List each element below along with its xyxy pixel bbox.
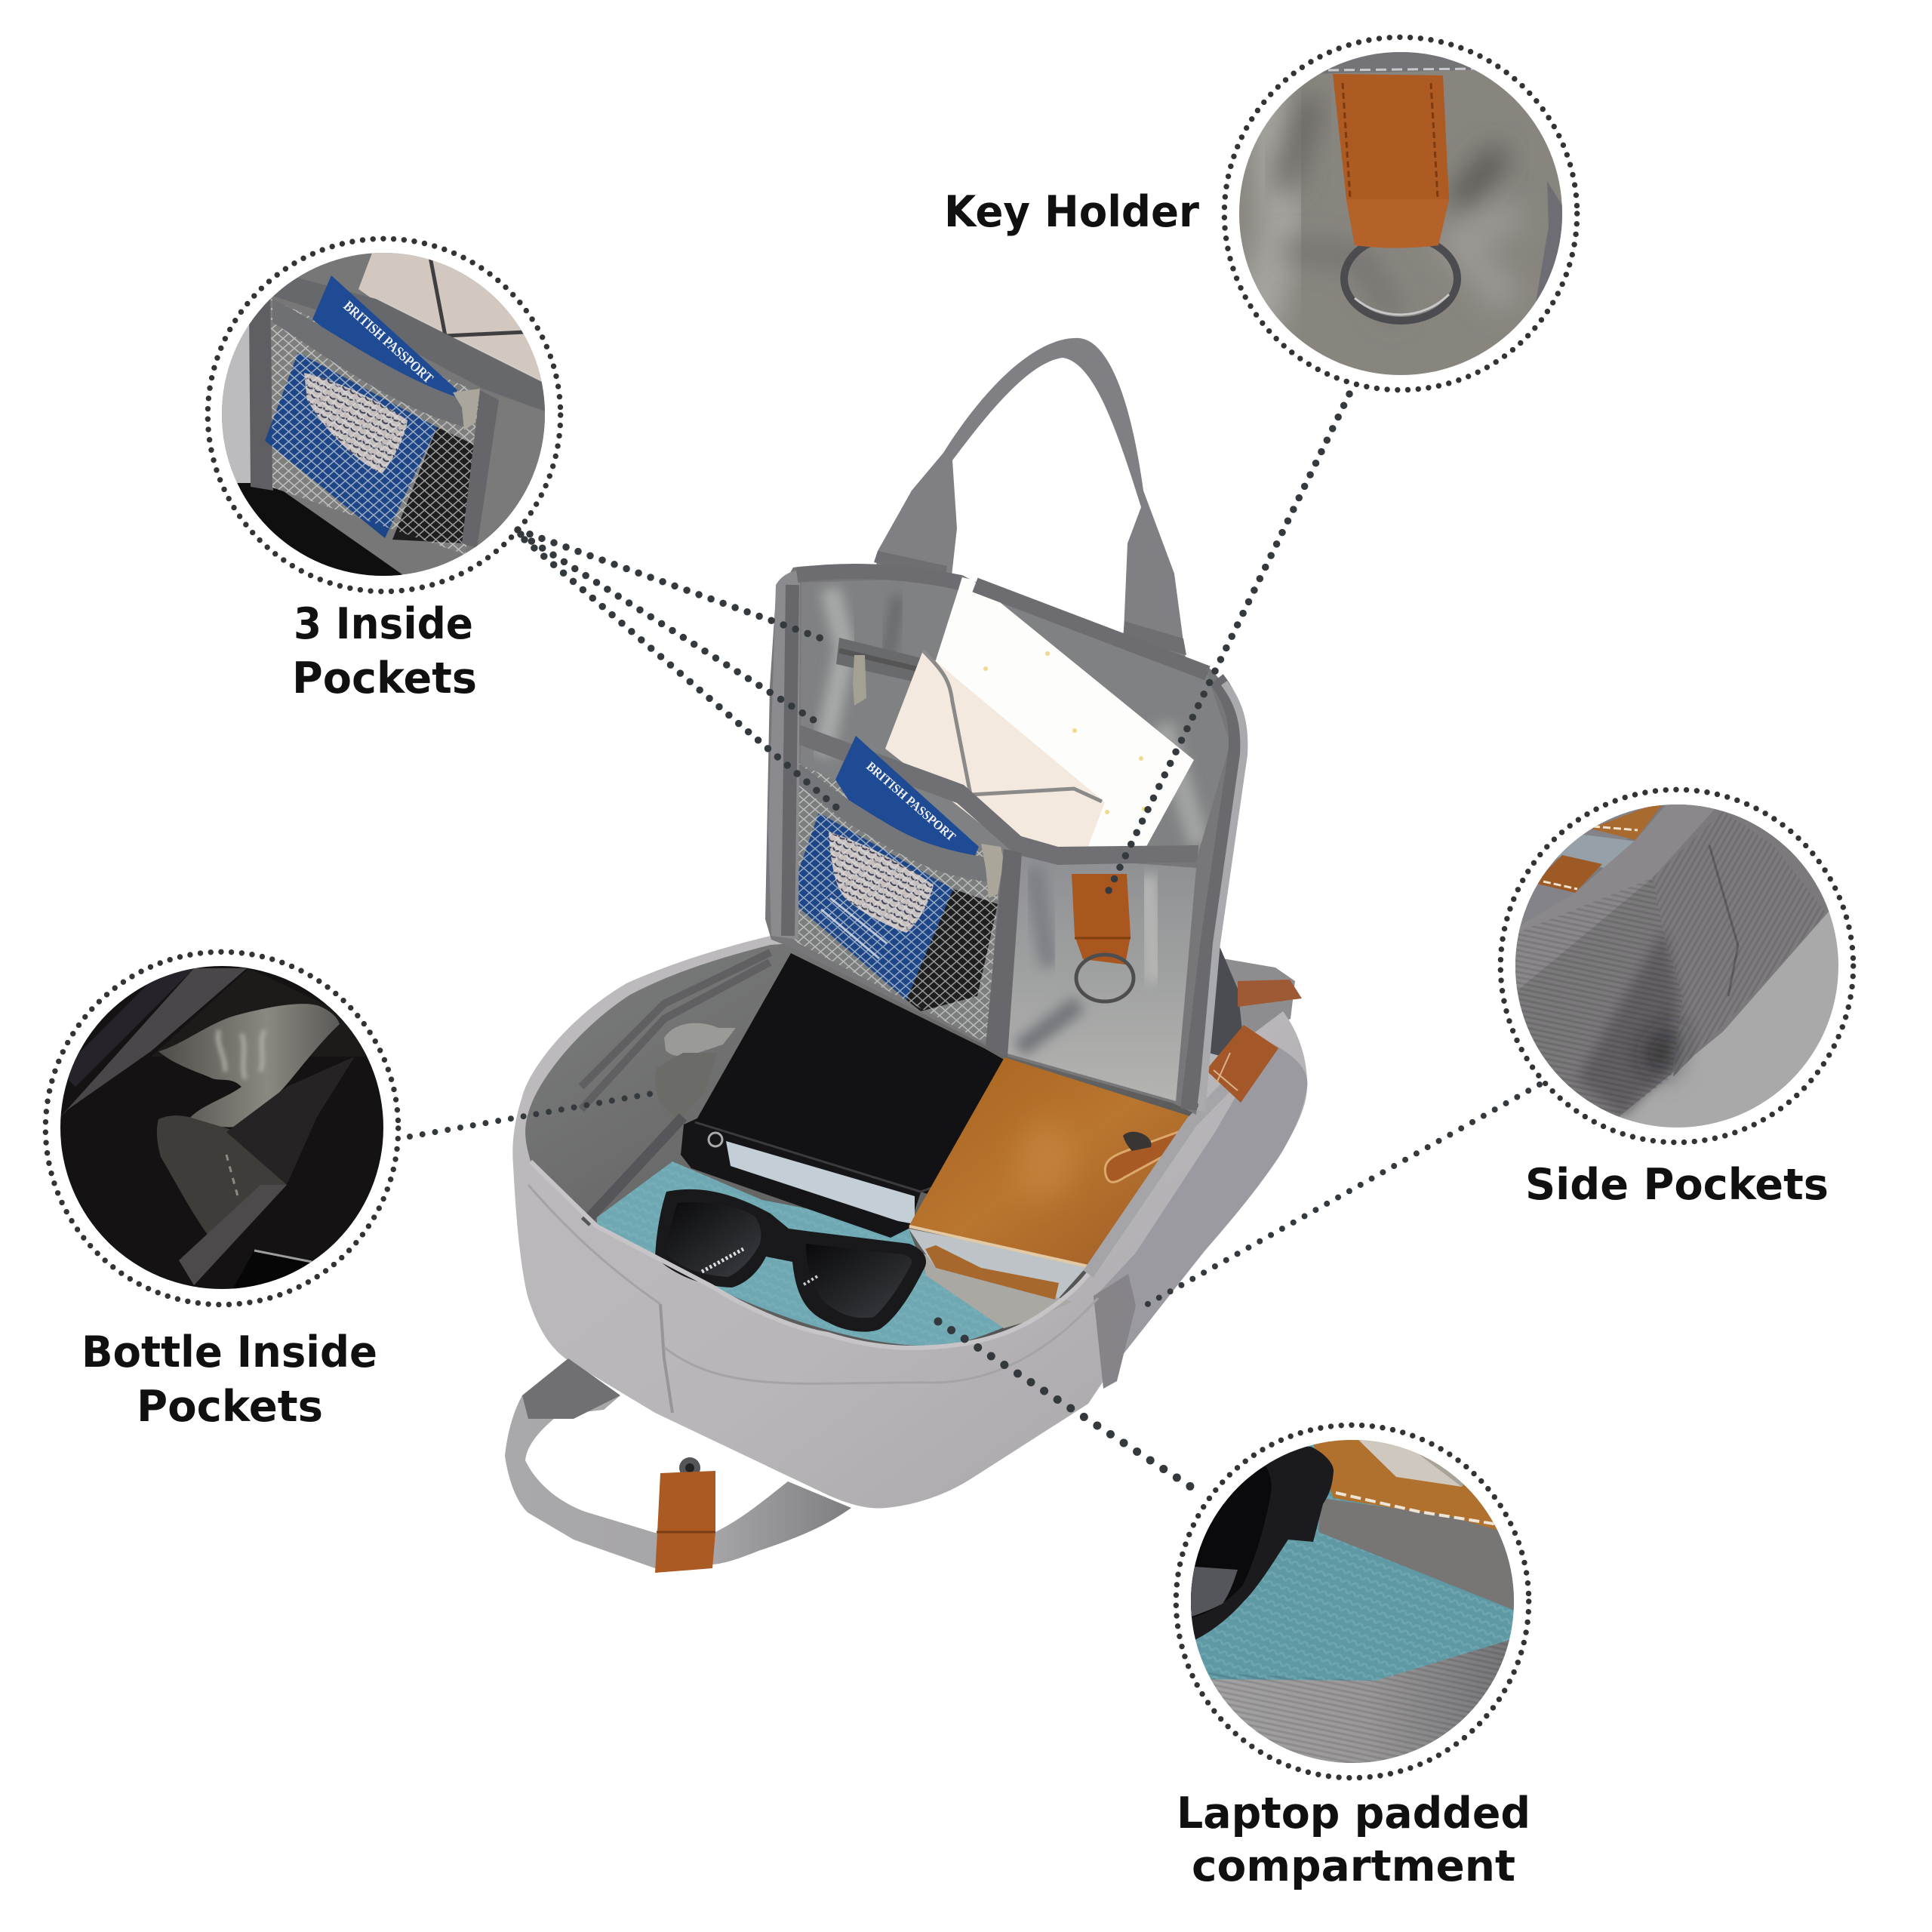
right zipper trim bbox=[1189, 679, 1237, 1109]
label bbox=[292, 599, 477, 703]
strap leather tab with snap bbox=[655, 1457, 715, 1573]
satin highlights bbox=[823, 589, 1200, 845]
front seam bbox=[660, 1304, 672, 1413]
crest engraving bbox=[829, 832, 934, 933]
pocket binding band bbox=[795, 724, 1198, 865]
passport emblem text lines bbox=[821, 898, 887, 958]
leader lines bbox=[410, 394, 1540, 1493]
label: Bottle Inside bbox=[82, 1327, 377, 1377]
soft seam lines bbox=[528, 1185, 1098, 1383]
sunglasses lens bbox=[1185, 1466, 1272, 1617]
opened flap bbox=[765, 565, 1244, 1115]
lower gathers bbox=[157, 1115, 287, 1243]
sunglasses frame bbox=[1185, 1438, 1334, 1641]
brown notebook bbox=[909, 1057, 1195, 1300]
pocket fold bbox=[1673, 1055, 1694, 1077]
side panel shading bbox=[1094, 1041, 1307, 1385]
callout: laptop compartment bbox=[1176, 1425, 1531, 1891]
bottle pocket elastic bbox=[655, 1023, 736, 1121]
zipper pull bbox=[981, 844, 1004, 898]
upper gathers bbox=[158, 1004, 340, 1127]
leader: bottle pocket bbox=[410, 1092, 660, 1137]
dotted ring bbox=[1176, 1425, 1529, 1778]
side tab stitching bbox=[1214, 1053, 1238, 1091]
leather strap bbox=[1333, 74, 1449, 248]
passport upper cover bbox=[835, 736, 979, 859]
dotted ring bbox=[1224, 37, 1577, 390]
key ring bbox=[1076, 955, 1134, 1001]
mesh back bbox=[272, 395, 466, 554]
zipper band bbox=[272, 299, 466, 427]
side pocket seam band bbox=[1094, 1274, 1136, 1389]
label: compartment bbox=[1192, 1841, 1515, 1891]
strap fold bbox=[1346, 199, 1449, 248]
vertical pocket binding bbox=[986, 849, 1022, 1057]
mesh net bbox=[792, 761, 1001, 1044]
backpack photo bbox=[505, 338, 1307, 1573]
label: Pockets bbox=[292, 654, 477, 703]
rim right band bbox=[1088, 1087, 1226, 1274]
passport upper cover: BRITISH PASSPORT bbox=[863, 759, 958, 844]
dark gap behind mesh bbox=[906, 889, 998, 1011]
silver crest bbox=[304, 373, 408, 474]
side leather tab bbox=[1206, 1025, 1278, 1103]
mesh pocket zipper bbox=[793, 761, 990, 882]
shell rim lip bbox=[531, 1122, 1192, 1348]
upper satin lining bbox=[800, 577, 1230, 860]
label bbox=[1177, 1789, 1531, 1891]
passport crest bbox=[829, 832, 934, 933]
top binding bbox=[797, 571, 1208, 673]
envelope bbox=[885, 651, 1105, 862]
passport upper cover bbox=[312, 275, 457, 404]
lower satin folds bbox=[1019, 868, 1155, 1049]
blue cover under mesh bbox=[265, 352, 437, 538]
white notebook bbox=[906, 577, 1194, 859]
leader: key holder bbox=[1109, 394, 1349, 891]
leader: inside pocket upper bbox=[518, 530, 828, 641]
dotted ring bbox=[1500, 789, 1854, 1143]
leader: inside pocket lower bbox=[525, 540, 839, 810]
top carry handle bbox=[874, 338, 1186, 664]
label: Side Pockets bbox=[1525, 1160, 1829, 1210]
key tab fold bbox=[1075, 937, 1131, 939]
leader: laptop compartment bbox=[938, 1321, 1200, 1493]
sunglasses bbox=[655, 1189, 926, 1332]
teal cloth texture bbox=[597, 1161, 1007, 1346]
callout: side pockets bbox=[1500, 789, 1854, 1210]
callout: inside pockets bbox=[208, 238, 561, 703]
label: Pockets bbox=[137, 1382, 323, 1432]
lower satin panel bbox=[1008, 855, 1196, 1101]
callout: key holder bbox=[944, 37, 1577, 390]
dotted ring bbox=[45, 952, 398, 1305]
metal ring bbox=[1344, 236, 1457, 321]
left zipper trim bbox=[788, 585, 792, 936]
front fabric bbox=[1185, 1638, 1517, 1774]
label: Laptop padded bbox=[1177, 1789, 1531, 1838]
upper pocket band bbox=[272, 273, 551, 414]
grey divider band bbox=[1318, 1498, 1517, 1611]
detail photo: passport pocket bbox=[219, 249, 558, 589]
left side zipper bbox=[768, 571, 800, 940]
label: 3 Inside bbox=[294, 599, 473, 649]
label: Key Holder bbox=[944, 187, 1199, 237]
envelope flap lines bbox=[923, 651, 1102, 801]
bottom grab strap bbox=[505, 1358, 851, 1571]
dotted ring bbox=[208, 238, 561, 592]
detail photo: padded compartment bbox=[1185, 1434, 1524, 1774]
strap band bbox=[1509, 800, 1723, 992]
back panel and outer strap stubs bbox=[1200, 936, 1302, 1113]
leader: side pocket bbox=[1140, 1084, 1540, 1309]
mesh pocket bbox=[789, 761, 1001, 1044]
ring highlight bbox=[1355, 294, 1449, 315]
main body outer shell bbox=[512, 936, 1307, 1508]
teal cloth bbox=[597, 1161, 1007, 1346]
inner divider trim bbox=[585, 1117, 683, 1223]
zipper trim of main compartment bbox=[581, 952, 771, 1109]
callout: bottle pockets bbox=[45, 952, 398, 1432]
leather key tab bbox=[1072, 874, 1131, 964]
grey fabric under notebook bbox=[921, 1253, 1072, 1328]
small zip pocket bbox=[836, 638, 924, 706]
detail photo: key ring bbox=[1230, 45, 1570, 385]
strap stitching bbox=[1343, 83, 1438, 198]
detail photo: passport pocket: BRITISH PASSPORT bbox=[340, 298, 436, 387]
interior lining bbox=[525, 943, 1208, 1348]
confetti dots bbox=[983, 651, 1146, 814]
passport cover through mesh bbox=[789, 813, 953, 1000]
right zipper teeth bbox=[1201, 683, 1244, 1111]
label bbox=[82, 1327, 377, 1432]
black binder bbox=[681, 953, 1005, 1238]
leader: inside pocket middle bbox=[521, 534, 822, 725]
detail photo: side pocket fold bbox=[1509, 800, 1849, 1140]
detail photo: elastic bottle pocket bbox=[53, 958, 392, 1298]
